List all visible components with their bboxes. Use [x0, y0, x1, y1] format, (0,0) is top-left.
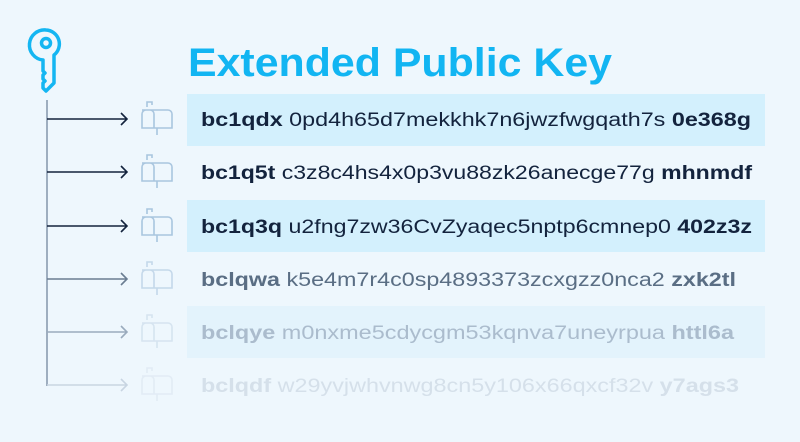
- address rows: bclqwa k5e4m7r4c0sp4893373zcxgzz0nca2 zxk2tl: [201, 270, 736, 291]
- tree connector lines: [47, 100, 127, 391]
- address rows: bc1qdx 0pd4h65d7mekkhk7n6jwzfwgqath7s 0e368g: [201, 110, 751, 131]
- address rows: [201, 110, 753, 397]
- address rows: bc1q5t c3z8c4hs4x0p3vu88zk26anecge77g mhnmdf: [201, 163, 753, 184]
- address rows: bc1q3q u2fng7zw36CvZyaqec5nptp6cmnep0 402z3z: [201, 217, 752, 238]
- icon: key: [29, 30, 59, 91]
- title: Extended Public Key: [188, 41, 613, 85]
- highlight bands: [187, 94, 765, 146]
- address rows: bclqye m0nxme5cdycgm53kqnva7uneyrpua httl6a: [201, 323, 735, 344]
- address rows: bclqdf w29yvjwhvnwg8cn5y106x66qxcf32v y7ags3: [201, 376, 739, 397]
- icons: mailboxes: [142, 102, 172, 401]
